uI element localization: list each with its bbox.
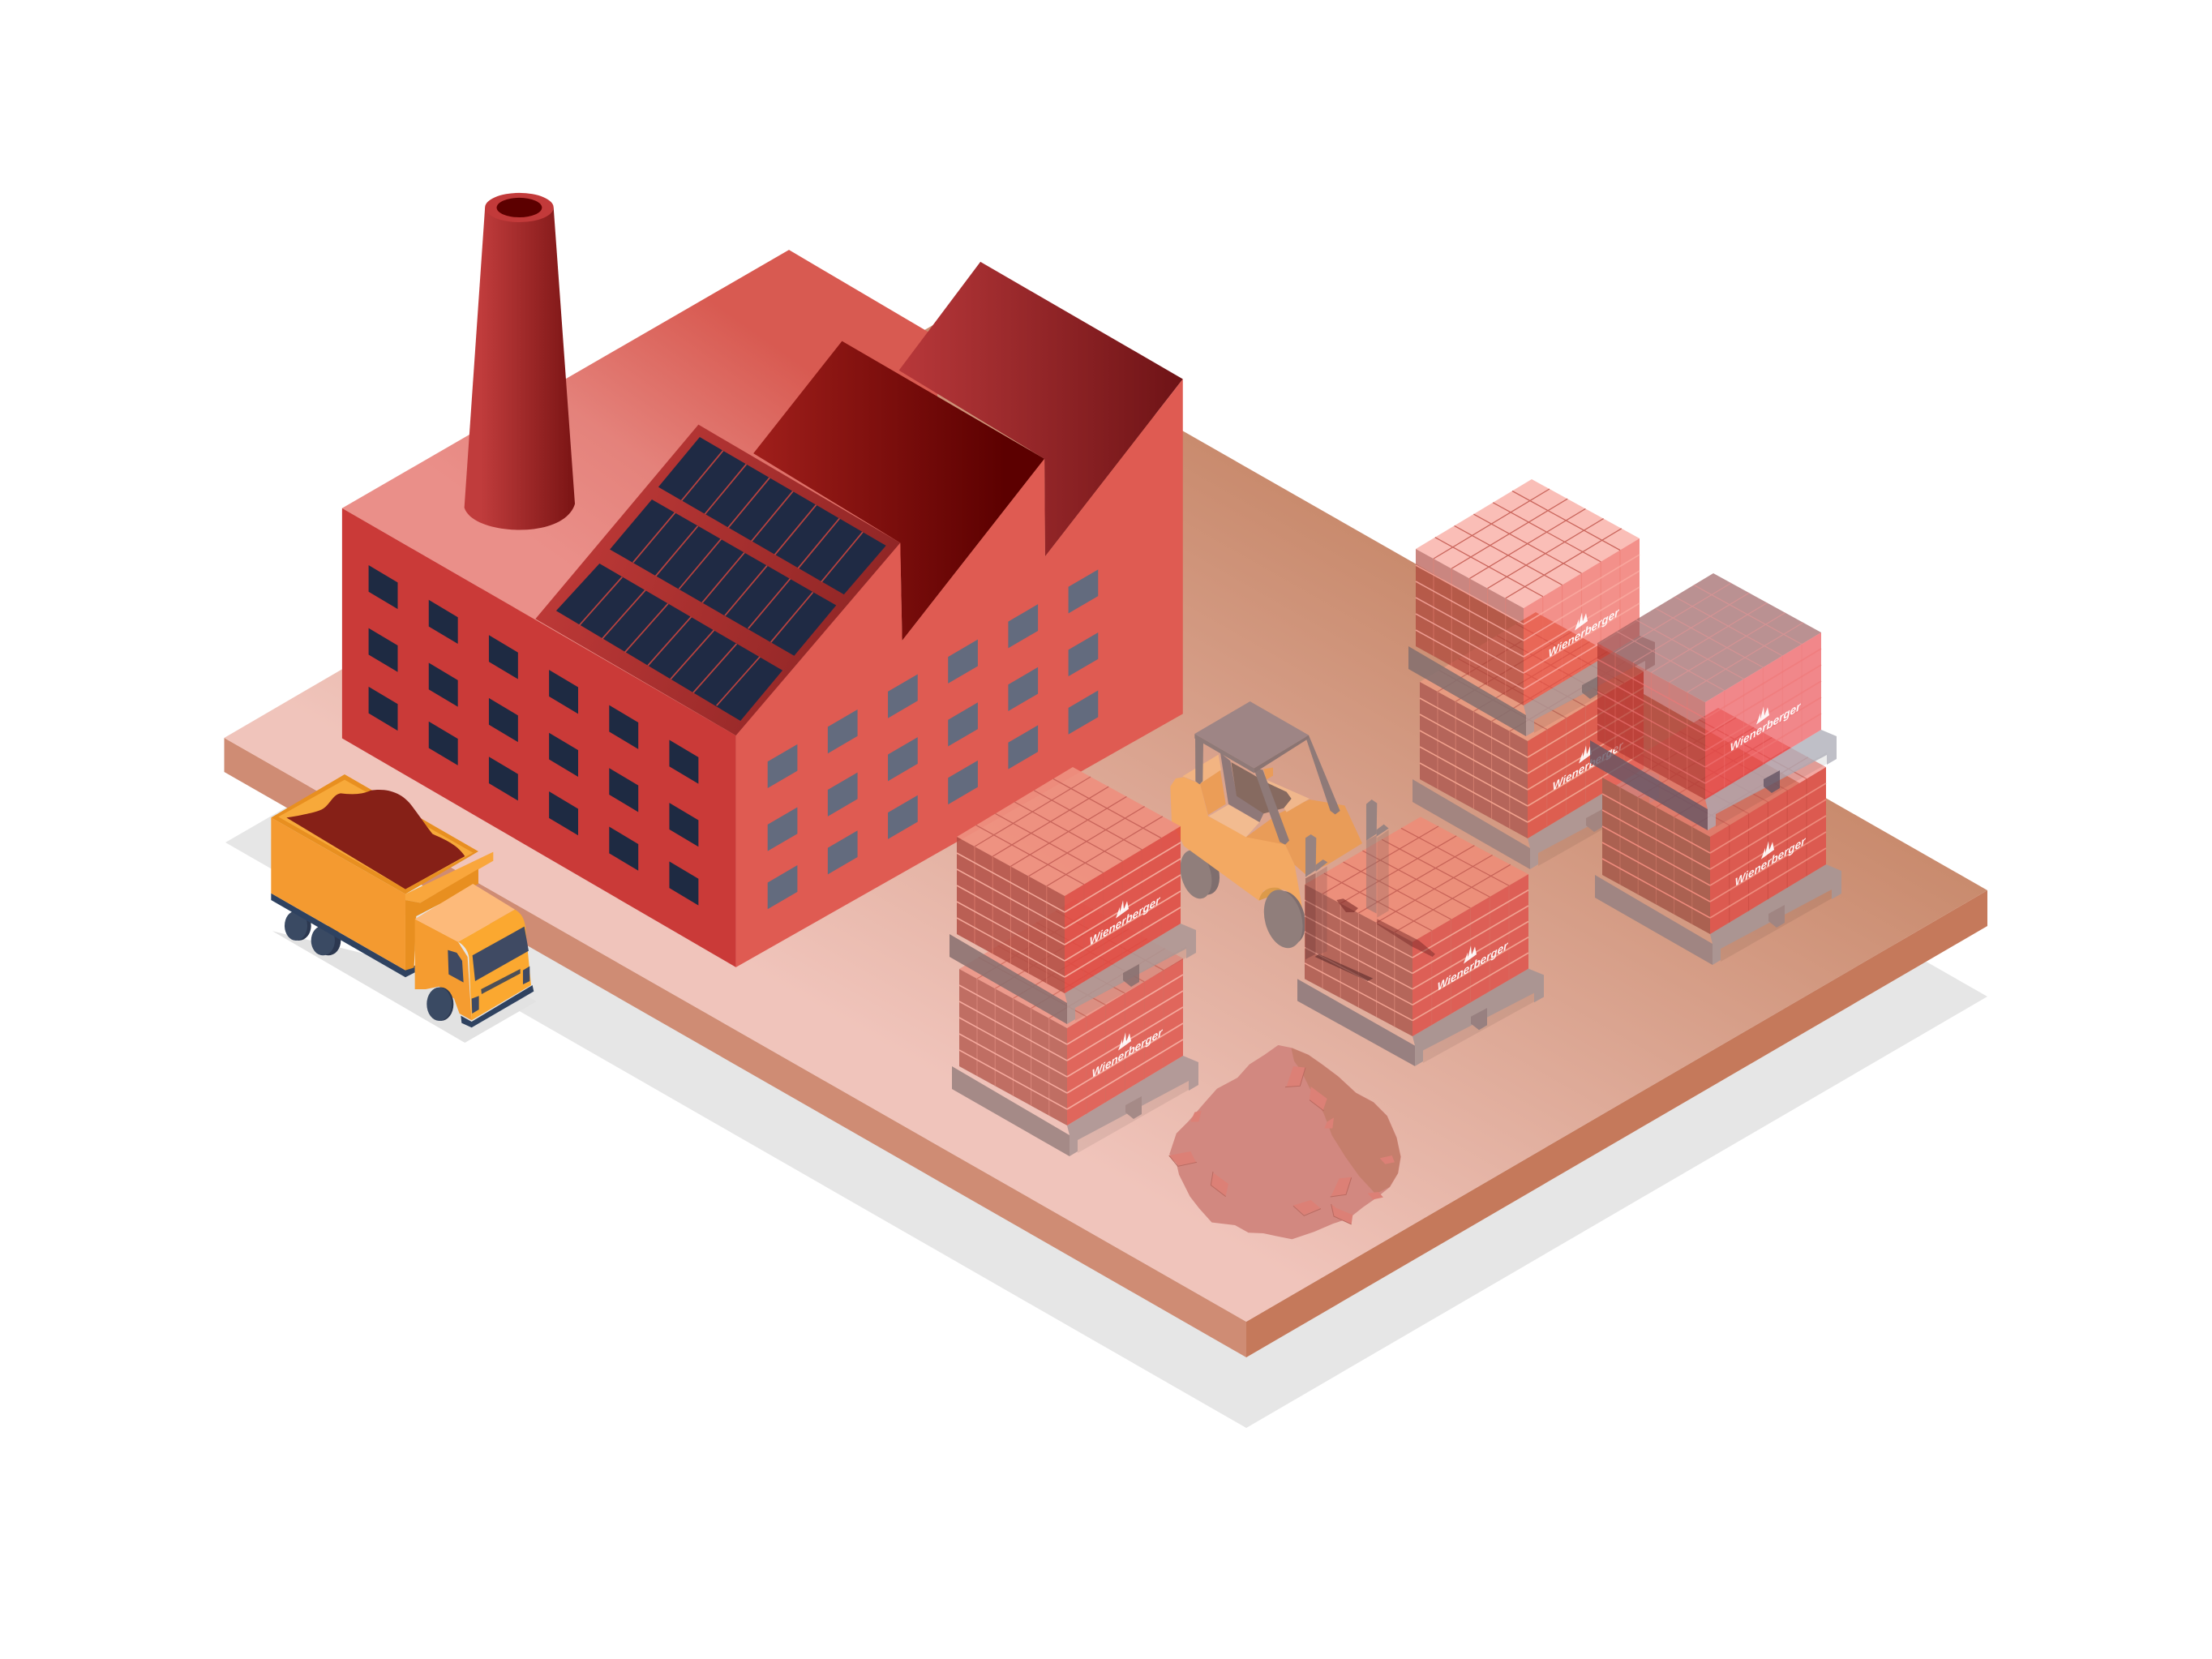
left wall bbox=[342, 508, 736, 967]
headlights bbox=[472, 967, 529, 1014]
brick stack: back middle lower bbox=[1413, 612, 1659, 869]
dump bed rim bbox=[271, 774, 478, 894]
forklift body bbox=[1170, 777, 1303, 911]
rubble pile bbox=[1169, 1046, 1400, 1238]
brick stack: front left upper bbox=[950, 767, 1196, 1024]
cab front bbox=[458, 910, 531, 1020]
side window bbox=[448, 950, 464, 983]
rear wheel bbox=[1175, 847, 1224, 902]
brick stack: right upper bbox=[1590, 573, 1837, 830]
grille bbox=[481, 969, 521, 994]
platform bbox=[224, 307, 1987, 1357]
ground shadow bbox=[225, 414, 1987, 1428]
brick stack: right upper: Wienerberger bbox=[1730, 700, 1802, 755]
right wall windows bbox=[768, 569, 1098, 909]
windshield bbox=[473, 927, 529, 981]
cab side bbox=[415, 919, 472, 1020]
brick stack: back middle lower: Wienerberger bbox=[1553, 739, 1624, 794]
rear deck bbox=[1182, 755, 1221, 783]
floor mat bbox=[1209, 804, 1259, 837]
left wall windows bbox=[369, 565, 698, 906]
seat bbox=[1220, 752, 1292, 822]
forklift mast and forks bbox=[1305, 830, 1435, 981]
dump truck bbox=[271, 774, 537, 1043]
dump bed side bbox=[271, 817, 405, 971]
rear wheels bbox=[285, 911, 341, 955]
brick stack: front left lower bbox=[952, 899, 1198, 1156]
factory building bbox=[342, 193, 1183, 967]
brick stack: back middle upper bbox=[1408, 479, 1655, 736]
cab guard bbox=[405, 852, 493, 971]
brick stack: right lower bbox=[1595, 708, 1841, 965]
hood bbox=[1246, 799, 1362, 874]
cab roof bbox=[1194, 701, 1309, 773]
cab roof bbox=[415, 884, 515, 942]
front wheel bbox=[1258, 885, 1311, 953]
bumper bbox=[461, 985, 534, 1027]
front wheel bbox=[427, 988, 453, 1021]
truck shadow bbox=[272, 931, 537, 1043]
near sawtooth roof bbox=[753, 341, 1044, 641]
solar panels bbox=[556, 437, 886, 721]
load of clay bbox=[286, 790, 465, 890]
far sawtooth roof bbox=[899, 262, 1183, 556]
flat roof bbox=[342, 250, 941, 735]
brick stack: forklift load: Wienerberger bbox=[1438, 939, 1509, 994]
right wall bbox=[736, 379, 1183, 967]
brick stack: front left upper: Wienerberger bbox=[1090, 894, 1161, 949]
mast tops bbox=[1305, 799, 1389, 877]
brick stack: front left lower: Wienerberger bbox=[1092, 1026, 1164, 1081]
brick stack: right lower: Wienerberger bbox=[1735, 834, 1807, 890]
brick stack: forklift load bbox=[1297, 817, 1544, 1066]
solar roof frame bbox=[535, 425, 900, 735]
dump bed inside bbox=[278, 780, 473, 890]
forklift bbox=[1170, 701, 1389, 953]
chassis bbox=[271, 894, 415, 977]
brick stack: back middle upper: Wienerberger bbox=[1549, 606, 1620, 661]
chimney bbox=[465, 193, 575, 529]
cab posts bbox=[1195, 735, 1340, 845]
